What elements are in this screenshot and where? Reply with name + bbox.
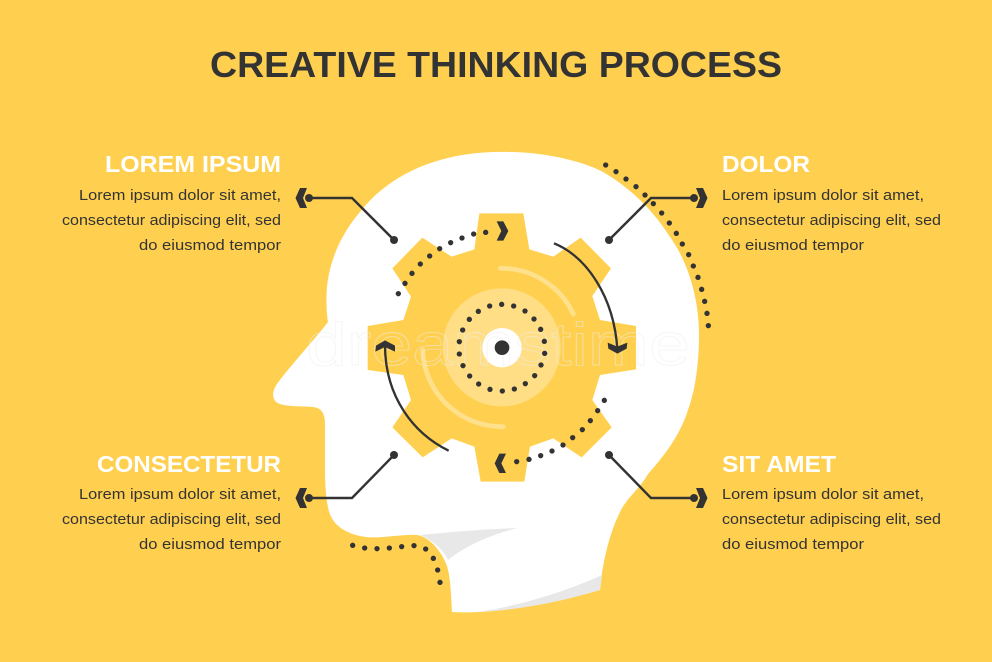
head silhouette xyxy=(273,152,699,612)
text block: dolor: consectetur adipiscing elit, sed xyxy=(722,213,941,229)
curved arrow left xyxy=(375,340,449,451)
watermark: dreamstime xyxy=(306,311,690,378)
dotted line: neck xyxy=(350,543,443,585)
text block: consectetur: consectetur adipiscing elit, sed xyxy=(62,512,281,528)
dark centre xyxy=(495,340,509,355)
light centre disc xyxy=(443,288,561,406)
text block: sit amet: do eiusmod tempor xyxy=(722,537,864,553)
text block: dolor: do eiusmod tempor xyxy=(722,238,864,254)
text block: sit amet: SIT AMET xyxy=(722,451,836,477)
text block: lorem ipsum: do eiusmod tempor xyxy=(139,238,281,254)
gear body xyxy=(368,213,636,482)
text block: consectetur: do eiusmod tempor xyxy=(139,537,281,553)
text block: lorem ipsum xyxy=(62,151,281,254)
text block: dolor xyxy=(722,151,941,254)
collar shadow xyxy=(477,575,602,612)
text block: dolor: Lorem ipsum dolor sit amet, xyxy=(722,188,924,204)
light arc top xyxy=(500,268,573,314)
text block: dolor: DOLOR xyxy=(722,151,810,177)
title: CREATIVE THINKING PROCESS xyxy=(210,44,782,85)
text block: lorem ipsum: consectetur adipiscing elit, sed xyxy=(62,213,281,229)
dotted line: crown of head xyxy=(603,162,711,328)
connector top right xyxy=(605,188,708,244)
dotted ring xyxy=(457,302,547,394)
gear overlays: ring, hub and curved arrows xyxy=(375,243,627,451)
dotted arrow top xyxy=(396,221,508,296)
gear icon xyxy=(368,213,636,482)
text block: lorem ipsum: LOREM IPSUM xyxy=(105,151,281,177)
connector bottom left xyxy=(296,451,398,508)
text block: lorem ipsum: Lorem ipsum dolor sit amet, xyxy=(79,188,281,204)
connector top left xyxy=(296,188,398,244)
neck shadow xyxy=(420,528,517,560)
text block: sit amet: Lorem ipsum dolor sit amet, xyxy=(722,487,924,503)
connector bottom right xyxy=(605,451,708,508)
light arc bottom xyxy=(423,350,503,427)
text block: sit amet xyxy=(722,451,941,553)
text block: consectetur xyxy=(62,451,281,553)
dotted arrow bottom xyxy=(495,398,607,473)
text block: sit amet: consectetur adipiscing elit, sed xyxy=(722,512,941,528)
text block: consectetur: CONSECTETUR xyxy=(97,451,281,477)
white centre xyxy=(482,328,522,367)
text block: consectetur: Lorem ipsum dolor sit amet, xyxy=(79,487,281,503)
curved arrow right xyxy=(554,243,627,354)
